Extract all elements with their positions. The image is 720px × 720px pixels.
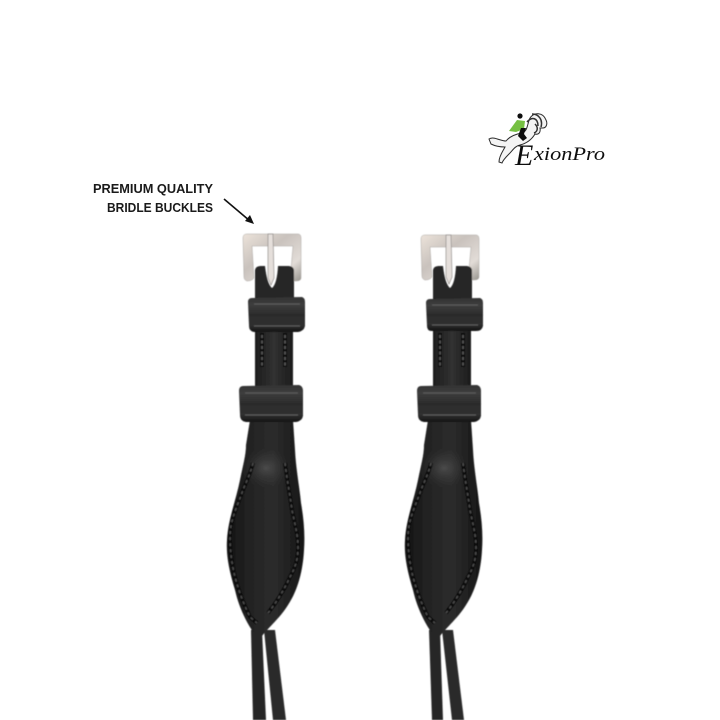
upper keeper (248, 297, 305, 332)
upper strap end (255, 266, 294, 300)
icon: jumping horse with rider (489, 113, 547, 163)
callout: premium quality bridle buckles (93, 182, 214, 215)
left bridle strap (227, 234, 305, 720)
upper keeper (426, 298, 483, 331)
buckle (421, 235, 479, 280)
cords (429, 630, 464, 720)
middle strap with stitching (255, 330, 293, 388)
middle strap with stitching (433, 330, 471, 388)
callout: premium quality bridle buckles: BRIDLE BUCKLES (107, 201, 213, 215)
logo: ExionPro (489, 113, 605, 172)
right bridle strap (405, 235, 483, 720)
lower leather pad with stitching (405, 420, 482, 636)
brand name: E (514, 139, 533, 172)
buckle tongue (446, 235, 452, 284)
upper strap end (433, 266, 472, 300)
callout: premium quality bridle buckles: PREMIUM QUALITY (93, 182, 214, 196)
lower keeper (417, 385, 481, 422)
buckle (243, 234, 301, 281)
cords (251, 630, 286, 720)
buckle tongue (268, 234, 274, 285)
lower keeper (239, 385, 303, 422)
brand name (514, 139, 605, 172)
brand name: xionPro (533, 144, 605, 165)
arrow pointing to buckle (224, 199, 254, 224)
lower leather pad with stitching (227, 420, 304, 636)
